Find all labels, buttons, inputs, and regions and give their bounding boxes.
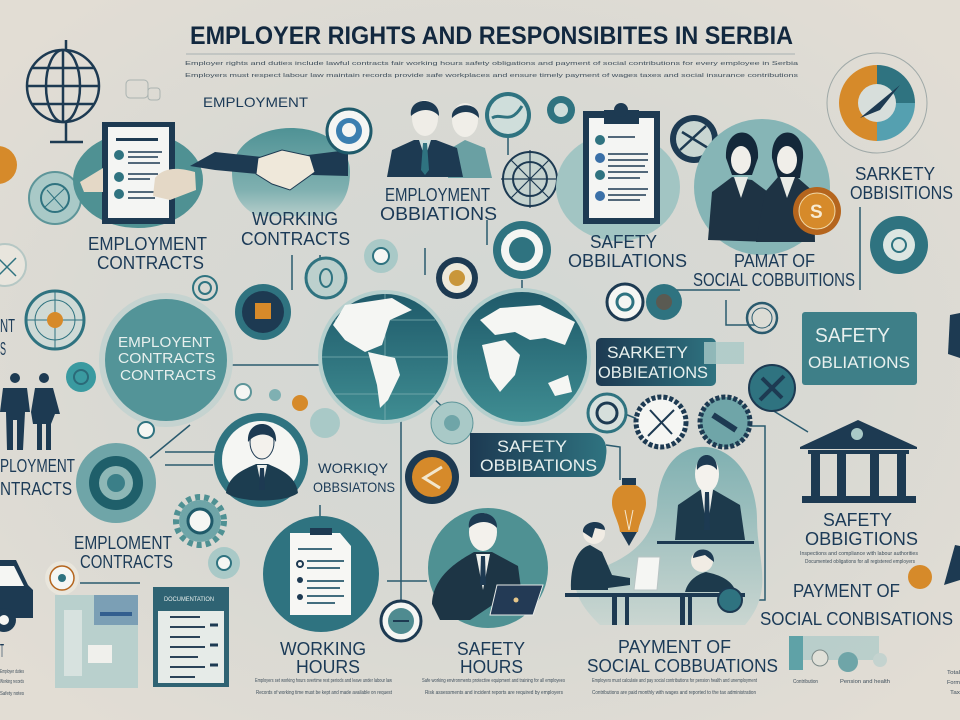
text: lower right note: Total: [947, 670, 960, 676]
intro text: [185, 61, 799, 79]
small table: [704, 342, 744, 364]
icon: teal people badge: [493, 221, 551, 279]
icon: ring small: [208, 547, 240, 579]
label: safety obligations building: OBBIGTIONS: [805, 529, 918, 549]
panel: safety obligations box: [802, 312, 917, 385]
icon: left ring badge: [29, 172, 81, 224]
label: safety obligations right: [850, 164, 953, 203]
icon: orange S coin: [793, 187, 841, 235]
label: working hours: WORKING: [280, 639, 366, 659]
panel: safety obligations dark label: OBBIBATIONS: [480, 456, 597, 475]
teal circle behind clipboard: [73, 132, 203, 228]
text: payment note: Contributions are paid monthly with wages and reported to the tax administration: [592, 690, 756, 696]
icon: small teal badge: [547, 96, 575, 124]
icon: government building: [800, 420, 917, 503]
label: working hours: [280, 639, 366, 677]
label: payment of social contributions right: PAYMENT OF: [793, 581, 900, 601]
text: working hours note: Employers set working hours overtime rest periods and leave under labour law: [255, 678, 392, 684]
panel: employment contracts circle: CONTRACTS: [118, 350, 215, 367]
text: building note: Documented obligations for all registered employers: [805, 559, 915, 565]
label: employment obligations: OBBIATIONS: [380, 204, 497, 224]
panel: working hours clipboard: [263, 516, 379, 632]
icon: right teal badge: [870, 216, 928, 274]
label: safety obligations building: [805, 510, 918, 549]
seated man left: [571, 522, 630, 590]
icon: compass badge: [26, 291, 84, 349]
desk: [657, 541, 754, 544]
label: employment contracts lower: EMPLOMENT: [74, 533, 172, 553]
text: working hours note: [255, 678, 393, 696]
icon: ring badge row: [306, 258, 346, 298]
label: partial left text: [0, 316, 15, 359]
icon: navy ring badge: [381, 601, 421, 641]
icon: small round badges: [138, 384, 340, 438]
title: EMPLOYER RIGHTS AND RESPONSIBITES IN SERBIA: [190, 22, 793, 50]
icon: pale teal ring: [431, 402, 473, 444]
label: employment contracts: [88, 234, 207, 273]
label: payment of social contributions: SOCIAL COBBUITIONS: [693, 270, 855, 290]
label: payment of social contributions right: [760, 581, 953, 629]
label: payment of social contributions centre: [587, 637, 778, 676]
icon: car label and notes: Safety notes: [0, 691, 24, 697]
panel: small icons strip: Pension and health: [840, 679, 890, 685]
icon: small crest: [718, 588, 742, 612]
teal circle: [694, 119, 830, 255]
panel: man with laptop: [428, 508, 548, 628]
panel: employment contracts circle: [99, 293, 233, 427]
woman right: [756, 132, 815, 242]
icon: portrait of manager: [214, 413, 308, 507]
label: working obligations: OBBSIATONS: [313, 479, 395, 495]
panel: sarkety obligations label: SARKETY: [607, 343, 688, 362]
label: payment of social contributions centre: PAYMENT OF: [618, 637, 731, 657]
text: safety hours note: [422, 678, 565, 696]
label: payment of social contributions: PAMAT OF: [734, 251, 815, 271]
panel: safety obligations dark label: [470, 433, 606, 477]
connectors: [80, 207, 860, 600]
table: [565, 593, 745, 625]
panel: courtroom scene: [565, 447, 762, 625]
icon: orange lock badge: [235, 284, 291, 340]
icon: orange S coin: S: [810, 202, 823, 223]
chart: gauge: [827, 53, 927, 153]
text: lower right note: [947, 670, 960, 696]
clipboard: [102, 122, 175, 224]
label: working contracts: CONTRACTS: [241, 229, 350, 249]
panel: sarkety obligations label: [596, 338, 716, 386]
icon: small teal badges row: [607, 284, 643, 320]
panel: safety obligations box: SAFETY: [815, 325, 890, 347]
panel: sarkety obligations label: OBBIEATIONS: [598, 363, 708, 382]
label: employment contracts: EMPLOYMENT: [88, 234, 207, 254]
panel: employment contracts circle: CONTRACTS: [120, 367, 216, 384]
panel: small icons strip: Contribution: [793, 679, 818, 685]
icon: edge dark shape: [944, 545, 960, 585]
label: partial left text: NT: [0, 316, 15, 336]
label: working contracts: WORKING: [252, 209, 338, 229]
icon: car label and notes: Working records: [0, 679, 24, 685]
icon: thin ring badge: [747, 303, 777, 333]
intro text: Employers must respect labour law maintain records provide safe workplaces and ensure timely payment of wages taxes and social insurance contributions: [185, 73, 799, 79]
icon: car label and notes: [0, 641, 24, 697]
panel: safety obligations clipboard: [556, 103, 680, 241]
label: employment contracts left: PLOYMENT: [0, 456, 75, 476]
icon: cross gear badge: [636, 397, 686, 447]
label: employment contracts left: NTRACTS: [0, 479, 72, 499]
panel: form document: DOCUMENTATION: [164, 597, 214, 603]
label: safety hours: SAFETY: [457, 639, 525, 659]
second person: [448, 103, 492, 178]
icon: handshake badge: [327, 109, 371, 153]
icon: hands: [256, 150, 315, 190]
panel: safety obligations box: OBLIATIONS: [808, 353, 910, 372]
icon: wireframe globe: [27, 40, 99, 142]
text: lower right note: Form: [947, 680, 960, 686]
panel: small icons strip: [789, 636, 890, 685]
text: safety hours note: Safe working environments protective equipment and training for all employees: [422, 678, 565, 684]
label: safety obligations: SAFETY: [590, 232, 657, 252]
icon: left ring top: [0, 244, 26, 286]
icon: teal crest badge: [646, 284, 682, 320]
standing man: [675, 455, 745, 540]
label: employment obligations: [380, 185, 497, 224]
icon: dark arms: [190, 150, 348, 176]
icon: light bulb: [612, 478, 646, 546]
document: [634, 557, 660, 590]
text: building note: Inspections and compliance with labour authorities: [800, 551, 919, 557]
panel: people holding hands: [0, 373, 60, 450]
hand: [80, 168, 196, 200]
panel: form document: [153, 587, 229, 687]
text: building note: [800, 551, 919, 565]
label: payment of social contributions: [693, 251, 855, 290]
panel: employment contracts clipboard: [73, 122, 203, 228]
icon: car label and notes: Employer duties: [0, 669, 24, 675]
label: safety obligations right: SARKETY: [855, 164, 935, 184]
icon: small teal D badge: [66, 362, 96, 392]
text: safety hours note: Risk assessments and incident reports are required by employers: [425, 690, 563, 696]
icon: concentric badge: [588, 394, 626, 432]
label: employment contracts: CONTRACTS: [97, 253, 204, 273]
text: lower right note: Tax: [950, 690, 960, 696]
label: working obligations: WORKIQY: [318, 460, 389, 476]
icon: orange coin left: [0, 146, 17, 184]
label: working obligations: [313, 460, 395, 495]
clipboard: [583, 103, 660, 224]
panel: employment contracts circle: EMPLOYENT: [118, 334, 212, 351]
seated man right: [685, 549, 736, 592]
panel: two employees: [387, 100, 492, 178]
label: payment of social contributions right: SOCIAL CONBISATIONS: [760, 609, 953, 629]
label: employment small heading: EMPLOYMENT: [203, 94, 308, 110]
icon: car: [0, 560, 33, 632]
icon: crossed badge: [670, 115, 718, 163]
icon: dark gear badge: [700, 397, 750, 447]
icon: world globe eurasia: [453, 288, 591, 426]
intro text: Employer rights and duties include lawful contracts fair working hours safety obligations and payment of social contributions for every employee in Serbia: [185, 61, 798, 67]
icon: small light badge: [364, 239, 398, 273]
first person: [387, 100, 463, 177]
label: employment contracts lower: CONTRACTS: [80, 552, 173, 572]
label: employment obligations: EMPLOYMENT: [385, 185, 490, 205]
icon: world globe americas: [318, 290, 452, 424]
icon: large concentric badge: [76, 443, 156, 523]
icon: orange ring: [45, 561, 79, 595]
label: working hours: HOURS: [296, 657, 360, 677]
panel: safety obligations dark label: SAFETY: [497, 437, 567, 456]
panel: two women payment: [694, 119, 841, 255]
text: payment note: [592, 678, 757, 696]
panel: handshake: [190, 128, 350, 216]
icon: spiral badge: [193, 276, 217, 300]
label: safety obligations building: SAFETY: [823, 510, 892, 530]
label: safety obligations: OBBILATIONS: [568, 251, 687, 271]
woman left: [708, 132, 770, 242]
icon: gear: [176, 497, 224, 545]
label: safety hours: [457, 639, 525, 677]
label: partial left text: S: [0, 339, 6, 359]
label: working contracts: [241, 209, 350, 249]
label: safety hours: HOURS: [460, 657, 523, 677]
label: safety obligations: [568, 232, 687, 271]
icon: car label and notes: T: [0, 641, 4, 661]
icon: crossed dark badge: [749, 365, 795, 411]
icon: faint document sketch: [126, 80, 160, 100]
icon: wheel badge: [501, 150, 559, 208]
icon: top teal badge: [485, 92, 531, 155]
label: employment contracts left: [0, 456, 75, 499]
panel: office photo: [55, 595, 138, 688]
text: working hours note: Records of working time must be kept and made available on request: [256, 690, 393, 696]
label: employment contracts lower: [74, 533, 173, 572]
icon: orange medal: [908, 565, 932, 589]
text: payment note: Employers must calculate and pay social contributions for pension health and unemployment: [592, 678, 757, 684]
icon: orange badge: [405, 450, 459, 504]
light teal circle: [556, 133, 680, 241]
label: payment of social contributions centre: SOCIAL COBBUATIONS: [587, 656, 778, 676]
teal blob: [575, 447, 762, 625]
icon: gold badge: [436, 257, 478, 299]
icon: edge shape: [948, 313, 960, 358]
